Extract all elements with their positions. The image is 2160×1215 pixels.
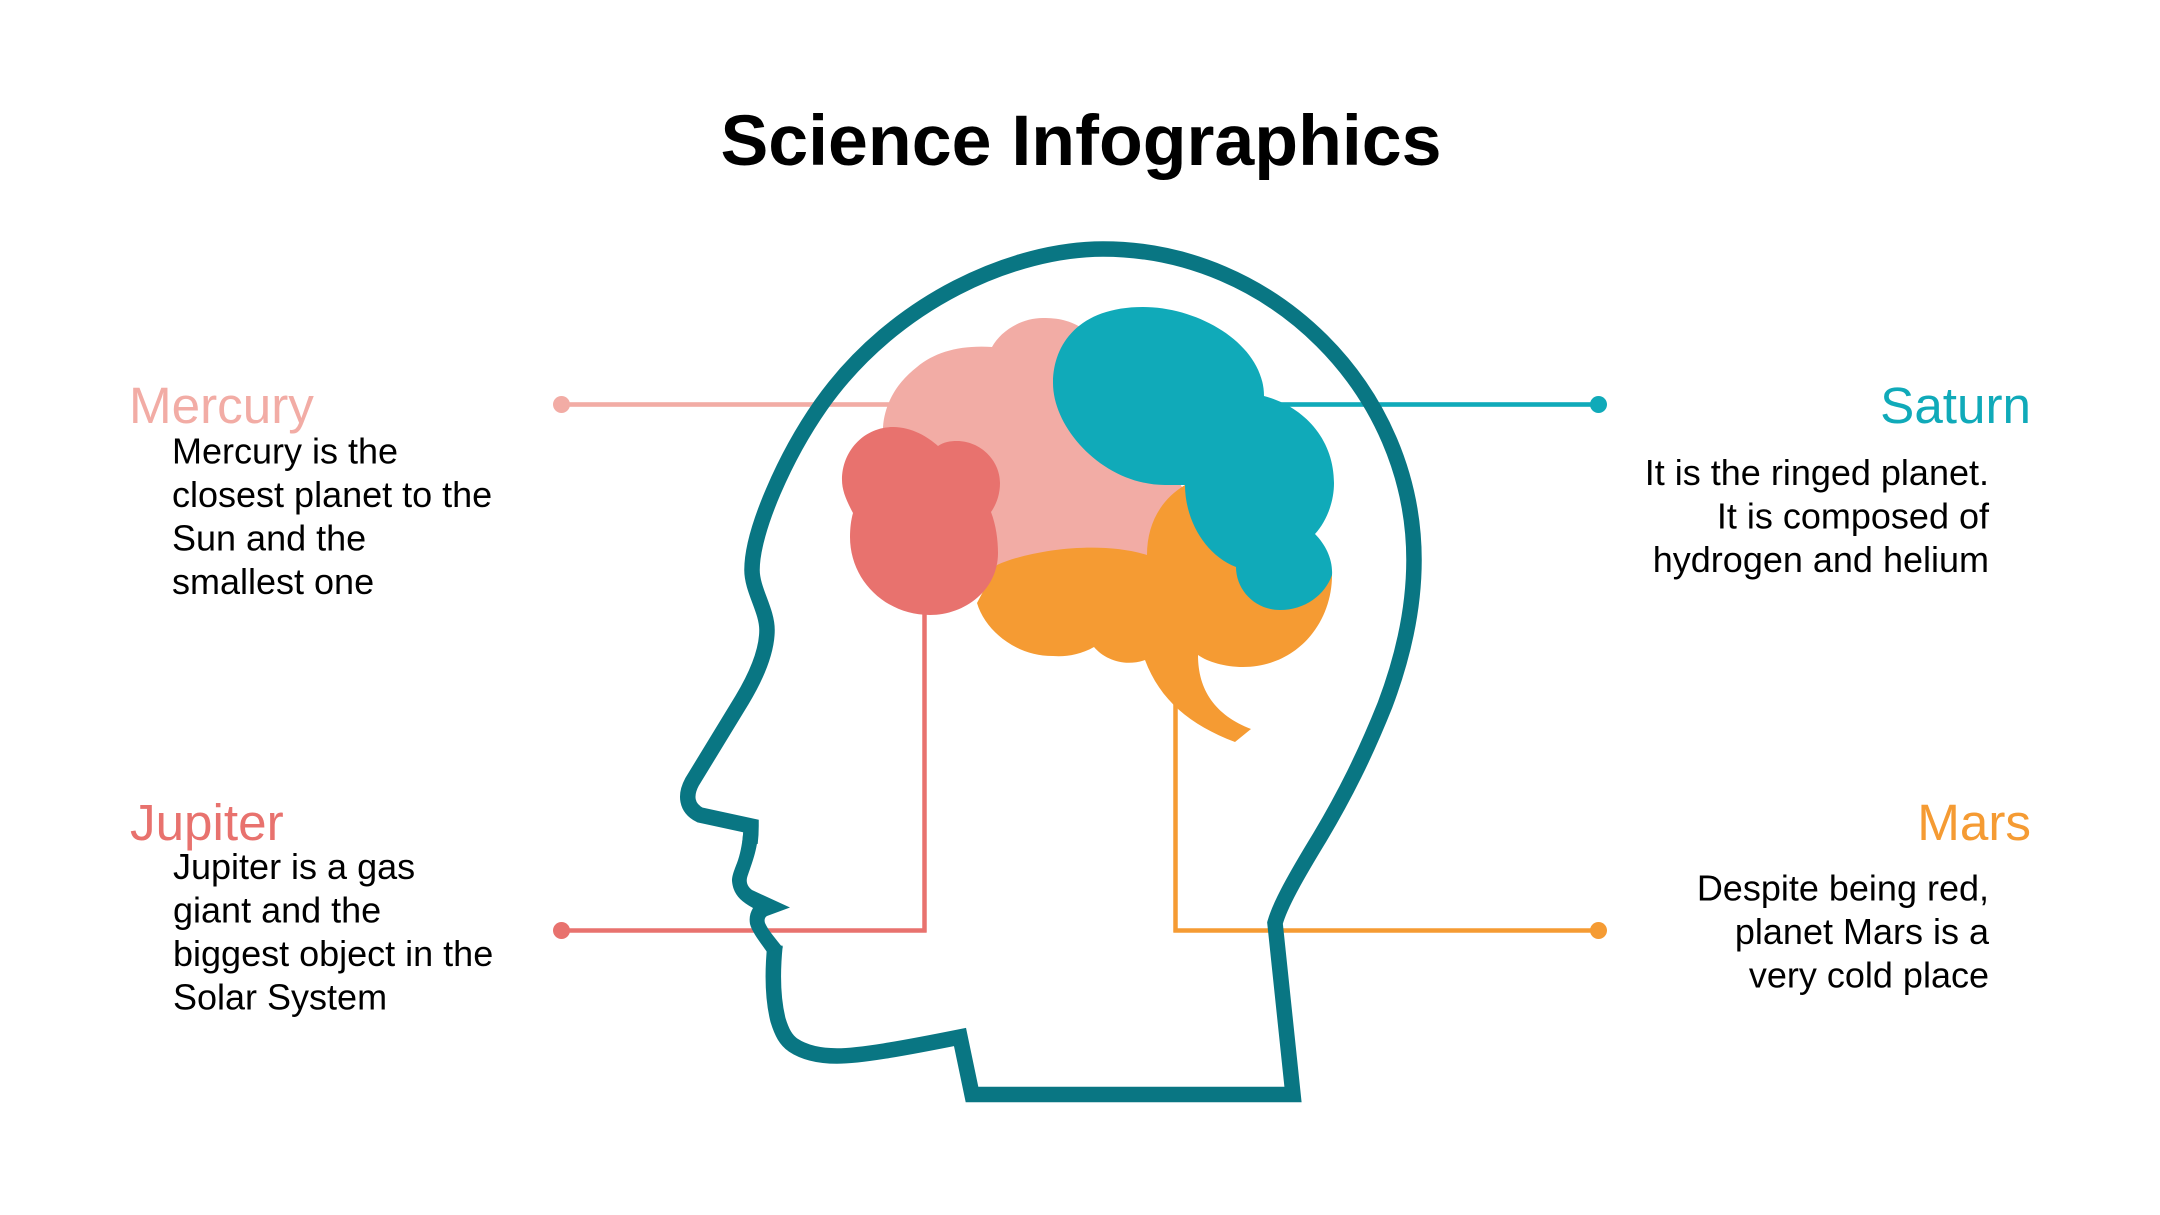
text: Jupiter description: Jupiter is a gas xyxy=(173,846,415,887)
panel: Mercury xyxy=(129,377,492,602)
text: Saturn description: hydrogen and helium xyxy=(1653,539,1989,580)
text: Mars description: planet Mars is a xyxy=(1735,911,1990,952)
text: Mercury description: closest planet to the xyxy=(172,474,492,515)
brain lobe: pink xyxy=(883,318,1190,580)
text: Jupiter description: Solar System xyxy=(173,976,387,1018)
brain lobe: orange xyxy=(977,485,1332,742)
text: Mars description: Despite being red, xyxy=(1697,868,1989,908)
panel: Mars xyxy=(1697,794,2031,996)
text: Saturn description: It is composed of xyxy=(1717,496,1990,536)
text: Mercury description: smallest one xyxy=(172,561,374,602)
text: Jupiter description: giant and the xyxy=(173,890,381,930)
connector: Mars xyxy=(1174,690,1607,939)
text: Mercury description: Mercury is the xyxy=(172,430,398,472)
panel: Jupiter xyxy=(130,794,493,1018)
heading: Mercury: Mercury xyxy=(129,377,314,434)
connector: Jupiter xyxy=(553,600,926,939)
brain lobe: red xyxy=(842,427,1000,615)
heading: Mars: Mars xyxy=(1917,794,2031,851)
text: Mercury description: Sun and the xyxy=(172,518,366,558)
text: Saturn description: It is the ringed planet. xyxy=(1645,452,1989,493)
heading: Saturn: Saturn xyxy=(1880,377,2031,434)
text: Mars description: very cold place xyxy=(1749,954,1989,996)
connector: Saturn xyxy=(1270,396,1607,413)
brain lobe: teal xyxy=(1053,307,1334,610)
connector: Mercury xyxy=(553,396,902,413)
text: Jupiter description: biggest object in the xyxy=(173,933,493,974)
lips xyxy=(732,835,790,952)
head outline xyxy=(688,249,1414,1094)
brain xyxy=(842,307,1334,742)
title: Science Infographics xyxy=(720,101,1442,181)
heading: Jupiter: Jupiter xyxy=(130,794,284,851)
panel: Saturn xyxy=(1645,377,2031,580)
